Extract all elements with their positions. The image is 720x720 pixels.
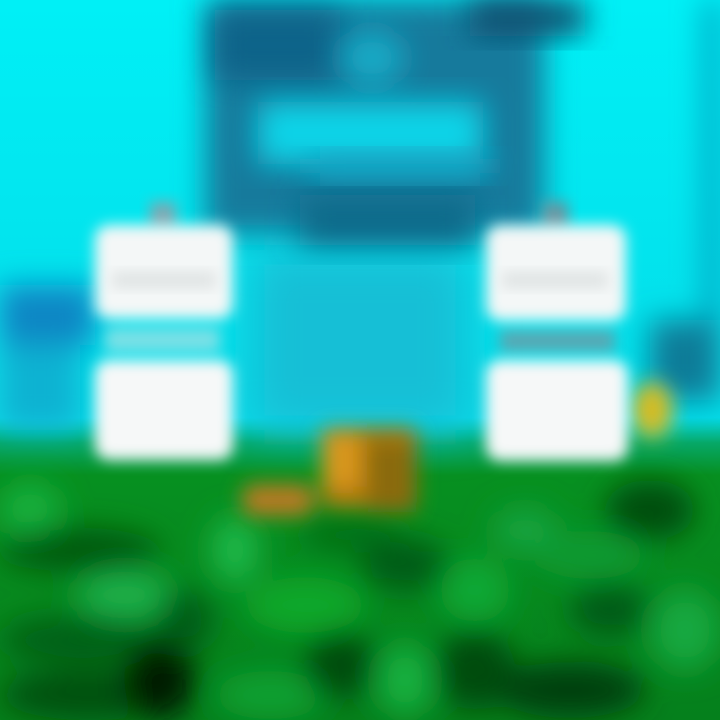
right grey strip between cards	[500, 330, 615, 352]
background: lower centre water	[250, 250, 470, 430]
icon: tree stump	[242, 428, 417, 516]
icon: yellow marker	[631, 382, 673, 438]
central heading glow	[258, 30, 490, 177]
panel: bottom left card	[95, 360, 233, 460]
left pale strip between cards	[105, 328, 220, 352]
panel: top right card	[486, 202, 626, 321]
panel: bottom right card	[486, 360, 628, 461]
background: right dark edge	[650, 0, 720, 400]
central dark panel	[205, 0, 585, 245]
background: left water band	[0, 285, 95, 430]
ground: grass patches	[0, 480, 720, 720]
panel: top left card	[95, 202, 233, 319]
